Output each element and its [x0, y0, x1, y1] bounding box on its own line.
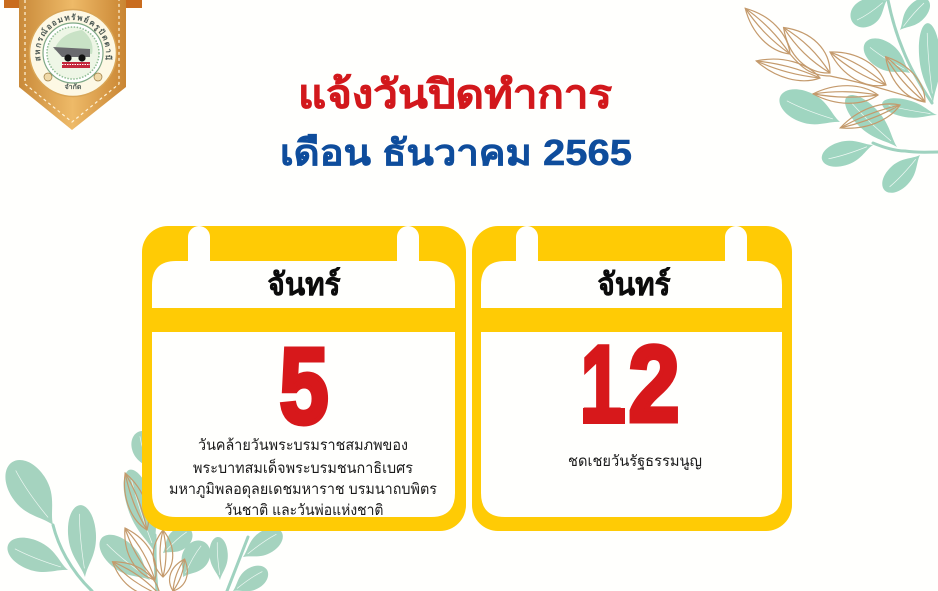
description [169, 437, 437, 519]
panel: calendar Monday 12 [472, 226, 792, 531]
description: วันชาติ และวันพ่อแห่งชาติ [224, 502, 384, 519]
date number: 5 [280, 325, 328, 446]
description: ชดเชยวันรัฐธรรมนูญ [568, 453, 702, 470]
logo ribbon badge: สหกรณ์ออมทรัพย์ครูปัตตานี [35, 13, 113, 62]
date number [581, 323, 680, 444]
decoration: bottom left foliage [0, 428, 288, 591]
subtitle: เดือน ธันวาคม 2565 [280, 132, 632, 173]
description: พระบาทสมเด็จพระบรมชนกาธิเบศร [193, 458, 413, 477]
panel: calendar Monday 5 [142, 226, 466, 531]
description: วันคล้ายวันพระบรมราชสมภพของ [198, 437, 408, 454]
day label: จันทร์ [598, 267, 671, 302]
logo ribbon badge: จำกัด [65, 83, 82, 91]
logo ribbon badge [4, 0, 142, 130]
day label: จันทร์ [268, 267, 341, 302]
date number: 2 [628, 323, 680, 444]
date number: 1 [581, 323, 621, 444]
title: แจ้งวันปิดทำการ [298, 73, 613, 117]
description: มหาภูมิพลอดุลยเดชมหาราช บรมนาถบพิตร [169, 481, 437, 499]
decoration: top right foliage [738, 0, 938, 199]
